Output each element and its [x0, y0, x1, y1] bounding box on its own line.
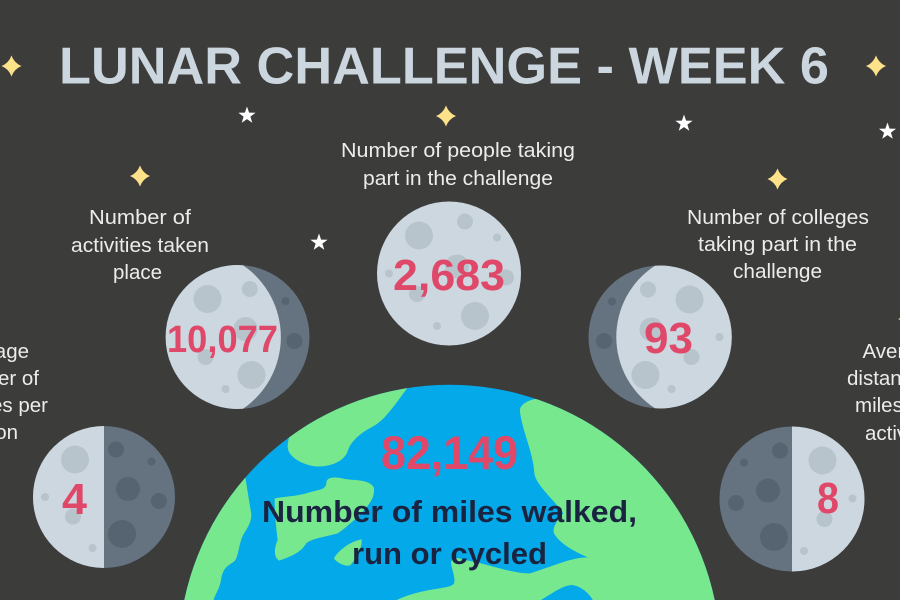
moon: activities per person, half moon: [33, 426, 175, 568]
icon: yellow sparkle far right edge: [898, 308, 900, 330]
label: colleges taking part: taking part in the: [698, 233, 857, 256]
moon: activities, waxing gibbous: [166, 265, 310, 409]
land: centre island: [275, 478, 374, 561]
land: right continent: [397, 398, 740, 600]
text: number of miles caption: Number of miles walked,: [262, 494, 637, 529]
icon: yellow sparkle top right: [866, 56, 886, 76]
label: activities taken place: Number of: [89, 206, 191, 229]
number: 10,077: 10,077: [167, 319, 278, 361]
number: 4: 4: [62, 475, 88, 524]
icon: white star 2: [675, 114, 693, 131]
land: small island: [334, 539, 362, 566]
text: number of miles caption: run or cycled: [352, 536, 547, 571]
icon: yellow sparkle right: [768, 168, 788, 190]
label: people taking part: part in the challenge: [363, 167, 553, 190]
moon: people, full moon: [377, 202, 521, 346]
earth: [184, 384, 715, 600]
icon: yellow sparkle top left: [2, 56, 22, 76]
label: activities taken place: place: [113, 261, 162, 284]
label: people taking part: Number of people taking: [341, 139, 575, 162]
icon: yellow sparkle centre: [436, 106, 456, 126]
icon: white star 1: [238, 106, 256, 123]
title: LUNAR CHALLENGE - WEEK 6: [59, 38, 829, 96]
icon: white star 4: [310, 234, 328, 250]
moon: colleges, mirrored gibbous: [588, 266, 732, 408]
water: bay in right continent: [541, 585, 593, 600]
land: left edge continent: [184, 478, 252, 600]
icon: yellow sparkle left: [130, 166, 150, 186]
label: colleges taking part: challenge: [733, 260, 822, 283]
number: 2,683: 2,683: [393, 251, 505, 300]
label: colleges taking part: Number of colleges: [687, 206, 869, 229]
number: 82,149: 82,149: [381, 426, 518, 479]
number: 93: 93: [644, 314, 693, 363]
land: top left continent: [288, 388, 408, 466]
moon: distance per activity, half moon: [720, 426, 864, 572]
icon: white star 3: [879, 122, 896, 139]
label: activities taken place: activities taken: [71, 234, 209, 257]
number: 8: 8: [817, 474, 839, 523]
